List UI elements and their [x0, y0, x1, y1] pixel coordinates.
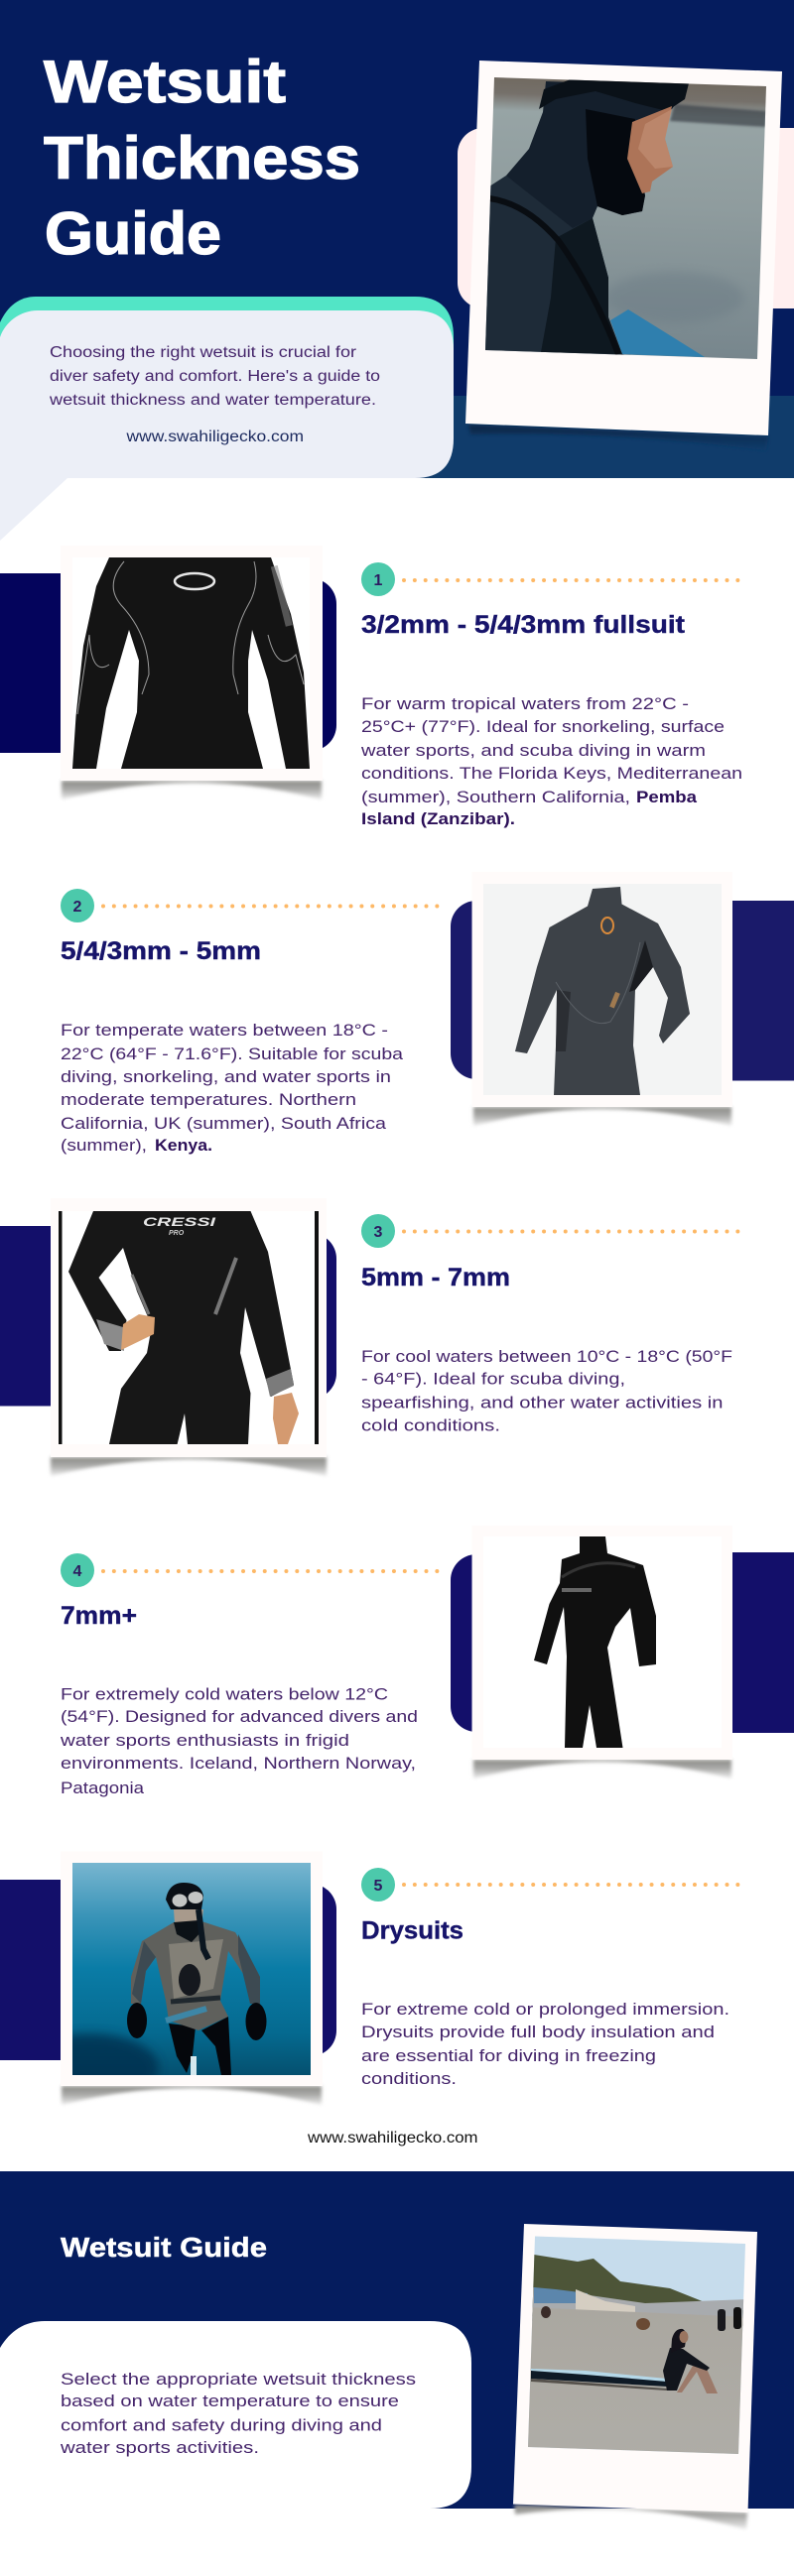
section 3 — [0, 1198, 739, 1476]
section 2 body text — [61, 1022, 404, 1155]
intro speech bubble — [0, 297, 454, 541]
section 2 number badge: 2 — [73, 899, 82, 916]
section 2 backing shapes — [451, 901, 794, 1081]
footer body text — [60, 2371, 416, 2457]
section 2 number badge — [61, 889, 94, 922]
polaroid: diver in hood — [465, 61, 782, 450]
header accent pink panel — [458, 128, 794, 308]
intro text: wetsuit thickness and water temperature. — [49, 392, 376, 409]
section 1 body text: water sports, and scuba diving in warm — [360, 742, 706, 760]
intro text: Choosing the right wetsuit is crucial for — [50, 344, 356, 361]
title: Guide — [45, 200, 221, 267]
intro text — [49, 344, 380, 409]
footer polaroid: beach — [513, 2224, 757, 2529]
section 5 dotted rule — [404, 1883, 739, 1887]
photo: black long-sleeve wetsuit — [72, 557, 310, 769]
section 4 number badge: 4 — [73, 1563, 82, 1580]
section 4 body text: water sports enthusiasts in frigid — [60, 1732, 349, 1750]
section 5 polaroid — [60, 1863, 324, 2105]
section 3 polaroid — [51, 1198, 327, 1476]
section 4 polaroid — [472, 1526, 732, 1779]
section 2 body text: moderate temperatures. Northern — [61, 1091, 356, 1109]
section 5 body text: For extreme cold or prolonged immersion. — [361, 2001, 729, 2019]
footer heading: Wetsuit Guide — [61, 2232, 267, 2263]
photo: Cressi wetsuit — [59, 1211, 319, 1444]
section 3 body text: cold conditions. — [361, 1416, 500, 1434]
section 4 — [60, 1526, 794, 1797]
section 3 dotted rule — [404, 1230, 739, 1234]
section 1 body text: For warm tropical waters from 22°C - — [361, 695, 689, 713]
footer body text: water sports activities. — [60, 2439, 259, 2457]
section 1 — [0, 546, 742, 828]
section 1 number badge: 1 — [374, 572, 383, 589]
section 4 body text: environments. Iceland, Northern Norway, — [61, 1755, 416, 1773]
section 1 number badge — [361, 562, 395, 596]
footer body text: comfort and safety during diving and — [61, 2416, 382, 2434]
photo: Cressi wetsuit: CRESSI — [143, 1215, 216, 1229]
section 4 dotted rule — [103, 1569, 438, 1573]
section 5 number badge: 5 — [374, 1878, 383, 1895]
footer body text: Select the appropriate wetsuit thickness — [61, 2371, 416, 2389]
photo: Cressi wetsuit: PRO — [169, 1230, 185, 1237]
section 4 body text: Patagonia — [61, 1779, 145, 1797]
section 4 backing shapes — [451, 1552, 794, 1733]
intro text: diver safety and comfort. Here's a guide to — [50, 368, 380, 385]
section 3 body text: - 64°F). Ideal for scuba diving, — [361, 1371, 625, 1389]
title: Wetsuit — [44, 49, 286, 115]
section 4 body text: For extremely cold waters below 12°C — [61, 1686, 388, 1704]
title: Thickness — [44, 125, 360, 191]
section 2 — [61, 872, 794, 1155]
section 4 heading: 7mm+ — [61, 1602, 137, 1630]
section 2 body text: Kenya. — [155, 1137, 212, 1155]
photo: grey wetsuit — [483, 884, 722, 1095]
section 2 body text: California, UK (summer), South Africa — [61, 1115, 387, 1133]
section 5 body text: conditions. — [361, 2070, 457, 2088]
section 2 body text: (summer), — [61, 1137, 147, 1155]
section 5 heading: Drysuits — [361, 1916, 463, 1944]
section 1 polaroid — [61, 546, 323, 799]
section 3 heading: 5mm - 7mm — [361, 1264, 510, 1291]
title — [44, 49, 360, 267]
section 3 body text — [361, 1348, 732, 1434]
section 3 body text: For cool waters between 10°C - 18°C (50°F — [361, 1348, 732, 1366]
section 2 body text: diving, snorkeling, and water sports in — [61, 1068, 391, 1086]
section 3 number badge: 3 — [374, 1224, 383, 1241]
section 1 body text: (summer), Southern California, — [361, 789, 630, 806]
section 2 heading: 5/4/3mm - 5mm — [61, 937, 261, 965]
section 1 body text — [360, 695, 742, 828]
header background — [0, 0, 794, 478]
footer white bubble — [0, 2321, 471, 2509]
website link: www.swahiligecko.com — [307, 2130, 478, 2147]
section 5 body text — [361, 2001, 729, 2088]
section 3 body text: spearfishing, and other water activities in — [361, 1395, 723, 1412]
section 1 body text: conditions. The Florida Keys, Mediterranean — [361, 765, 742, 783]
section 5 body text: Drysuits provide full body insulation and — [361, 2024, 715, 2041]
photo: freediver underwater — [72, 1863, 311, 2075]
section 1 dotted rule — [404, 578, 739, 582]
section 5 backing shapes — [0, 1880, 336, 2060]
section 1 body text: Pemba — [636, 789, 698, 806]
section 1 heading: 3/2mm - 5/4/3mm fullsuit — [361, 611, 686, 639]
photo: diver profile — [485, 77, 766, 359]
section 1 body text: 25°C+ (77°F). Ideal for snorkeling, surface — [361, 718, 725, 736]
section 1 body text: Island (Zanzibar). — [361, 810, 515, 828]
section 2 dotted rule — [103, 905, 438, 909]
intro website: www.swahiligecko.com — [125, 429, 304, 445]
section 5 number badge — [361, 1868, 395, 1901]
section 2 body text: For temperate waters between 18°C - — [61, 1022, 388, 1040]
section 4 number badge — [61, 1553, 94, 1587]
section 4 body text — [60, 1686, 418, 1797]
section 3 number badge — [361, 1214, 395, 1248]
section 2 body text: 22°C (64°F - 71.6°F). Suitable for scuba — [61, 1045, 404, 1063]
section 1 backing shapes — [0, 573, 336, 753]
section 4 body text: (54°F). Designed for advanced divers and — [61, 1708, 418, 1726]
photo: woman on the beach with surfboard — [526, 2232, 749, 2460]
photo: black full wetsuit — [534, 1536, 656, 1748]
section 3 backing shapes — [0, 1226, 336, 1407]
section 5 — [0, 1851, 739, 2105]
footer body text: based on water temperature to ensure — [61, 2392, 399, 2410]
footer background — [0, 2171, 794, 2509]
section 5 body text: are essential for diving in freezing — [361, 2047, 656, 2065]
section 2 polaroid — [472, 872, 732, 1126]
